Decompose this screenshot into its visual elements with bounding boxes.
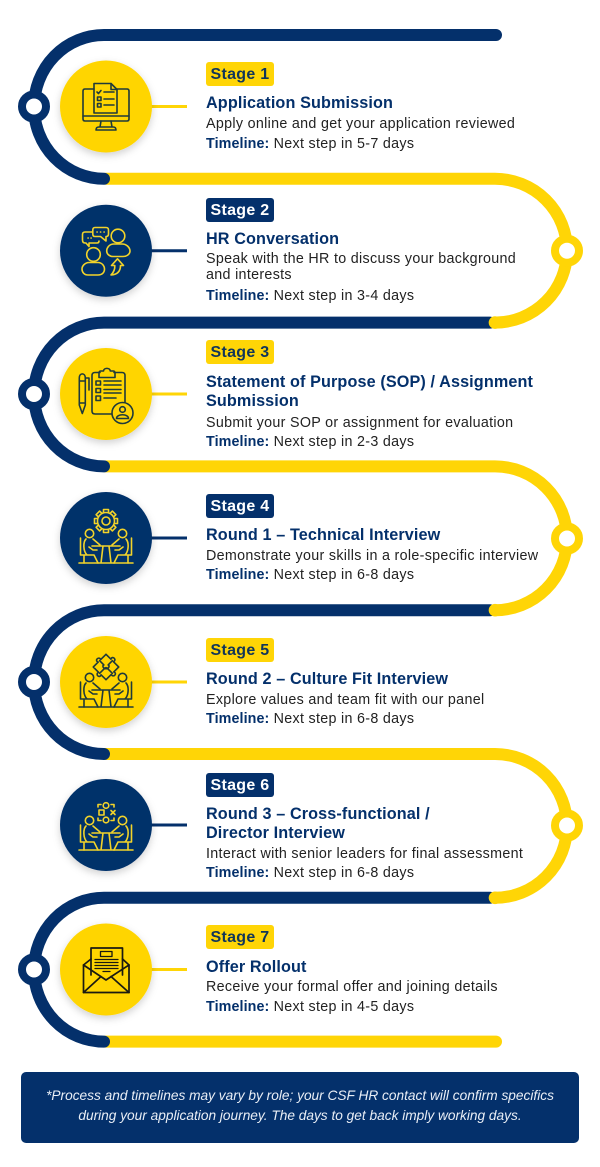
timeline: stage 7: Timeline: Next step in 4-5 days xyxy=(206,999,414,1015)
heading: stage 2: HR Conversation xyxy=(206,230,339,248)
icon circle: stage 5 xyxy=(60,636,152,728)
timeline: stage 6: Timeline: Next step in 6-8 days xyxy=(206,865,414,881)
heading: stage 4: Round 1 – Technical Interview xyxy=(206,526,440,544)
icon circle: stage 3 xyxy=(60,348,152,440)
yellow ring nodes xyxy=(555,239,579,837)
icon: clipboard, pen and person xyxy=(79,368,133,424)
heading: stage 3: Submission xyxy=(206,392,299,410)
navy ring nodes xyxy=(22,94,46,982)
timeline: stage 4: Timeline: Next step in 6-8 days xyxy=(206,567,414,583)
badge: stage 7: Stage 7 xyxy=(210,929,270,946)
yellow track segments xyxy=(106,179,567,1042)
heading: stage 7: Offer Rollout xyxy=(206,958,306,976)
icon circle: stage 6 xyxy=(60,779,152,871)
icon circle: stage 2 xyxy=(60,205,152,297)
timeline: stage 1: Timeline: Next step in 5-7 days xyxy=(206,136,414,152)
description: stage 1: Apply online and get your application reviewed xyxy=(206,116,515,132)
badge: stage 4: Stage 4 xyxy=(210,498,270,515)
badge: stage 2 xyxy=(206,198,274,222)
yellow track end caps xyxy=(489,316,501,904)
badge: stage 2: Stage 2 xyxy=(210,202,270,219)
heading: stage 1: Application Submission xyxy=(206,94,393,112)
icon: computer with checklist xyxy=(83,84,129,130)
stage 3 text xyxy=(206,340,533,450)
timeline: stage 3: Timeline: Next step in 2-3 days xyxy=(206,434,414,450)
footnote panel: *Process and timelines may vary by role; your CSF HR contact will confirm specifics xyxy=(46,1088,554,1103)
badge: stage 1 xyxy=(206,62,274,86)
stage 2 text xyxy=(206,198,516,304)
badge: stage 4 xyxy=(206,494,274,518)
heading: stage 6 xyxy=(206,805,430,842)
timeline: stage 2: Timeline: Next step in 3-4 days xyxy=(206,288,414,304)
icon circle: stage 1 xyxy=(60,60,152,152)
stage 4 text xyxy=(206,494,538,583)
icon circle: stage 4 xyxy=(60,492,152,584)
stage 7 text xyxy=(206,925,498,1015)
description: stage 6: Interact with senior leaders for final assessment xyxy=(206,846,523,862)
icon: culture fit meeting with puzzle xyxy=(79,650,133,707)
badge: stage 3 xyxy=(206,340,274,364)
badge: stage 5 xyxy=(206,638,274,662)
stage 6 text xyxy=(206,773,523,881)
footnote panel xyxy=(21,1072,579,1143)
heading: stage 6: Director Interview xyxy=(206,824,345,842)
stage 1 text xyxy=(206,62,515,152)
footnote panel: during your application journey. The days to get back imply working days. xyxy=(78,1108,522,1123)
heading: stage 5: Round 2 – Culture Fit Interview xyxy=(206,670,448,688)
description: stage 2 xyxy=(206,251,516,283)
icon: technical interview meeting with gear xyxy=(79,510,133,563)
heading: stage 3: Statement of Purpose (SOP) / Assignment xyxy=(206,373,533,391)
description: stage 7: Receive your formal offer and joining details xyxy=(206,979,498,995)
icon circle: stage 7 xyxy=(60,924,152,1016)
description: stage 3: Submit your SOP or assignment for evaluation xyxy=(206,415,513,431)
navy track segments xyxy=(34,35,496,1042)
description: stage 5: Explore values and team fit with our panel xyxy=(206,692,484,708)
icon: people in conversation xyxy=(82,228,130,275)
description: stage 2: Speak with the HR to discuss your background xyxy=(206,251,516,267)
heading: stage 6: Round 3 – Cross-functional / xyxy=(206,805,430,823)
badge: stage 3: Stage 3 xyxy=(210,344,270,361)
stage 5 text xyxy=(206,638,484,727)
description: stage 4: Demonstrate your skills in a role-specific interview xyxy=(206,548,538,564)
connector lines xyxy=(150,106,187,970)
icon: open envelope with letter xyxy=(84,948,129,992)
badge: stage 5: Stage 5 xyxy=(210,642,270,659)
badge: stage 1: Stage 1 xyxy=(210,66,270,83)
heading: stage 3 xyxy=(206,373,533,410)
badge: stage 7 xyxy=(206,925,274,949)
badge: stage 6: Stage 6 xyxy=(210,777,270,794)
timeline: stage 5: Timeline: Next step in 6-8 days xyxy=(206,711,414,727)
description: stage 2: and interests xyxy=(206,267,292,283)
icon: director interview meeting with shapes xyxy=(79,803,133,850)
badge: stage 6 xyxy=(206,773,274,797)
